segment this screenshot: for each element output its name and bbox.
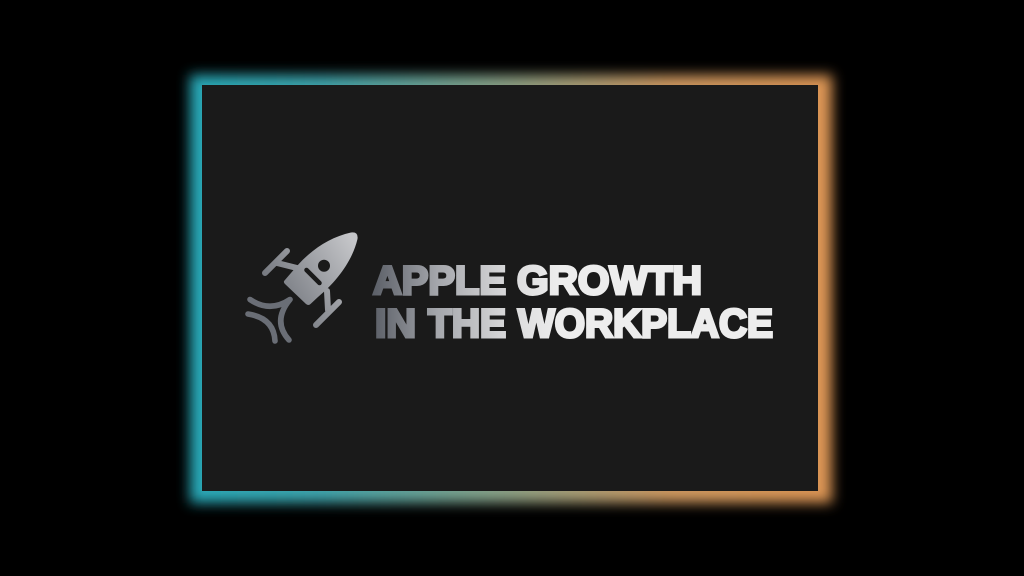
title line 2: THE bbox=[428, 302, 506, 346]
title line 1: APPLE bbox=[373, 259, 506, 303]
rocket exhaust trails bbox=[248, 300, 290, 341]
rocket window bbox=[318, 260, 330, 272]
rocket slot bbox=[306, 270, 320, 283]
title bbox=[373, 259, 773, 346]
rocket fins bbox=[265, 251, 339, 325]
title line 1 bbox=[373, 259, 702, 303]
title line 2: IN bbox=[375, 302, 416, 346]
glowing gradient frame bbox=[190, 75, 832, 503]
rocket body bbox=[284, 232, 358, 305]
dark panel bbox=[202, 85, 818, 491]
title line 1: GROWTH bbox=[517, 259, 702, 303]
title line 2: WORKPLACE bbox=[518, 302, 773, 346]
icon: rocket bbox=[248, 232, 358, 341]
title line 2 bbox=[375, 302, 773, 346]
